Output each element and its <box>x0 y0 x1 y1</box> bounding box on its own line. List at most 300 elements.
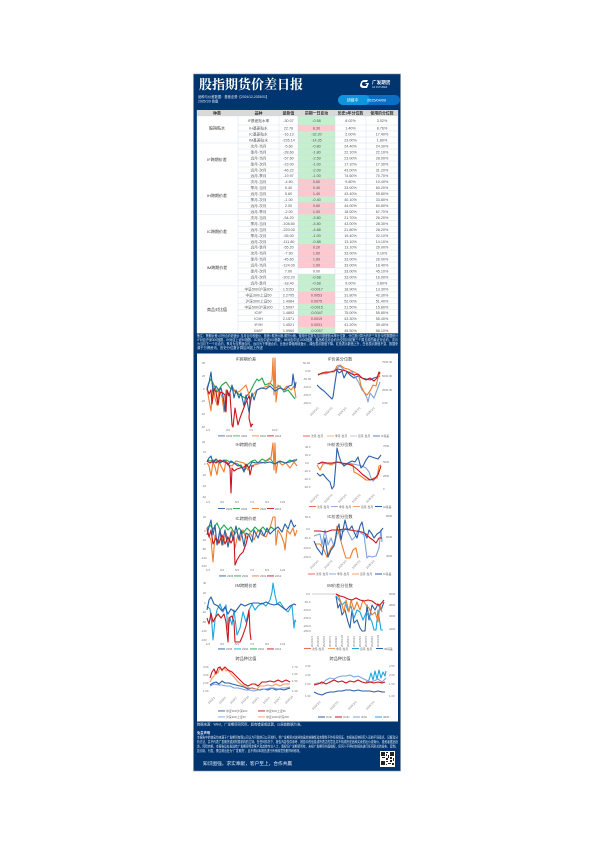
rows: IH spreads: 次月-当月 <box>251 179 267 184</box>
chart: index basis ratios: 2.50 <box>305 664 311 668</box>
rows: IF spreads: -46.22 <box>283 168 294 172</box>
chart: IM spread line: 1/3 <box>206 642 210 646</box>
rows: ratios: 55.80% <box>376 311 389 315</box>
chart: IM spread line: -80 <box>202 620 206 624</box>
rows: IC spreads: 43.00% <box>344 222 357 226</box>
legend: IF spread line: 2303 <box>226 434 233 438</box>
rows: index basis: -30.07 <box>283 119 294 123</box>
chart: IM percentile: 2023/1/3 <box>310 636 314 647</box>
chart: IC spread line: 3/3 <box>220 568 224 572</box>
risk disclaimer: 如引用、刊发，需注明出处为“广发期货”，且不得对本报告进行有悖原意的删节和修改。 <box>197 748 302 753</box>
chart: IC spread line: 5/3 <box>235 568 239 572</box>
chart: IM percentile: 4600 <box>389 614 396 618</box>
category labels: 股指贴水 <box>209 124 225 130</box>
date pill: 研报中 <box>347 97 359 102</box>
rows: IH spreads: 季月-次月 <box>251 197 267 202</box>
rows: IM spreads: 9.10% <box>377 252 388 256</box>
rows: IH spreads: 远月-当月 <box>251 191 267 196</box>
chart: IM percentile: 4800 <box>389 603 396 607</box>
rows: ratios: 43.30% <box>344 317 357 321</box>
chart: index ratios: 1.50 <box>292 679 298 683</box>
chart: IM percentile: IM价差分位数 <box>327 582 354 589</box>
legend: IH spread line: 2301 <box>260 507 267 511</box>
slogan: 知识图强，求实奉献，客户至上，合作共赢 <box>203 760 292 767</box>
rows: IF spreads: -1.00 <box>312 174 321 178</box>
chart: IF spread line: 7/3 <box>249 428 253 432</box>
rows: IH spreads: 0.60 <box>313 180 320 184</box>
rows: IC spreads: -4.68 <box>312 228 321 232</box>
chart: index basis ratios: 1.50 <box>389 682 395 686</box>
chart: IM spread line: 20 <box>203 591 207 595</box>
chart: IM percentile: 4400 <box>389 627 396 631</box>
rows: IC spreads: -55.00 <box>283 234 294 238</box>
chart: index ratios: 2023/10 <box>240 694 250 705</box>
rows: IM spreads: -202.20 <box>282 276 295 280</box>
rows: IC spreads: 13.10% <box>344 240 357 244</box>
rows: IC spreads <box>251 215 389 250</box>
legend: IC spread line <box>219 574 282 578</box>
logo <box>360 79 391 89</box>
rows: IF spreads: 22.10% <box>376 150 389 154</box>
date pill <box>338 95 400 105</box>
chart: IM percentile: 2023/5/3 <box>322 636 326 647</box>
rows: IH spreads: 18.00% <box>344 210 357 214</box>
table header: 前期一日变动 <box>305 110 328 115</box>
chart: index basis ratios: 2023/1/3 <box>311 700 322 711</box>
chart: IF spread percentile: 2023/1/3 <box>309 406 320 417</box>
chart: IM percentile: -50.0 <box>304 600 311 604</box>
rows: IH spreads: 2.00 <box>285 204 292 208</box>
rows: IF spreads: -23.00 <box>283 162 294 166</box>
chart: index ratios: 2023/7 <box>229 696 238 705</box>
legend: index ratios: 中证1000/沪深300 <box>266 715 289 719</box>
rows: ratios: 52.00% <box>344 299 357 303</box>
rows: index basis: 2.00% <box>345 132 356 136</box>
chart: IF spread percentile: -50.00 <box>303 377 311 381</box>
rows: IM spreads: 远月-次月 <box>251 275 267 280</box>
chart: IF spread percentile: 2023/7/3 <box>323 406 334 417</box>
chart: IC percentile: 2024/1/3 <box>337 559 348 570</box>
chart: IM percentile: 2023/11/3 <box>340 634 344 647</box>
chart: IH percentile: 0 <box>383 487 385 491</box>
rows: ratios: 2.2705 <box>283 293 294 297</box>
chart: index ratios: 2.00 <box>203 681 209 685</box>
chart: index ratios: 1.30 <box>292 689 298 693</box>
legend: IM spread line: 2302 <box>242 647 249 651</box>
rows: IC spreads: -108.80 <box>282 222 295 226</box>
rows: IF spreads: 次月-当月 <box>251 143 267 148</box>
legend: IF spread line: 2302 <box>241 434 248 438</box>
rows: IF spreads: 季月-当月 <box>251 149 267 154</box>
chart: index ratios: 2024/7 <box>273 696 282 705</box>
legend: IM percentile <box>304 647 393 651</box>
rows: IH spreads: -2.00 <box>284 210 293 214</box>
legend: IF percentile: 远月-当月 <box>358 434 370 438</box>
legend: index ratios: 中证500/上证50 <box>266 709 286 713</box>
rows: IM spreads: 远月-季月 <box>251 280 267 286</box>
chart: index basis ratios: 2023/7/3 <box>329 700 340 711</box>
rows: index basis: 8.02% <box>345 119 356 123</box>
legend: IM spread line <box>218 647 282 651</box>
chart: IH spread line: 0 <box>204 462 206 466</box>
rows: IM spreads: 26.00% <box>376 258 389 262</box>
rows: IH spreads: 9.80% <box>345 180 356 184</box>
legend: IH percentile: 次月-当月 <box>317 505 329 509</box>
rows: IF spreads: 远月-次月 <box>251 167 267 172</box>
chart: IM percentile: -150.0 <box>303 616 311 620</box>
chart: IF spread line: 0 <box>203 387 205 391</box>
rows: ratios: IM/IF <box>254 329 263 333</box>
chart: IC percentile: 6000 <box>386 535 393 539</box>
legend: IF spread line <box>218 434 282 438</box>
chart: index ratios: 3.00 <box>203 673 209 677</box>
legend: IH spread line: 2303 <box>226 507 233 511</box>
category labels: 商品对比值 <box>207 306 227 312</box>
rows: IM spreads: 33.00% <box>344 276 357 280</box>
rows: IM spreads: -124.00 <box>282 264 295 268</box>
table note: 备注：跨期价差=月份合约收盘价-当月合约收盘价，基差=现货价格-期货价格，使用分位数为当月基差贴水率分位数，分位数计算为历史三年至今的数据统计 <box>197 333 399 338</box>
rows: ratios: 1.4892 <box>283 311 294 315</box>
logo: GF FUTURES <box>372 86 388 89</box>
rows: IC spreads: 19.40% <box>344 234 357 238</box>
chart: index ratios: 2024/1 <box>251 696 260 705</box>
rows: IM spreads: 3.80% <box>377 282 388 286</box>
chart: IH percentile: 7500 <box>383 444 390 448</box>
table header: 历史3年分位数 <box>338 110 363 115</box>
chart: IF spread percentile: -200.0 <box>303 401 311 405</box>
chart: IH spread line: -40 <box>202 484 206 488</box>
legend: IH spread line <box>218 507 282 511</box>
chart: IH spread line: IH跨期价差 <box>236 441 256 448</box>
table <box>197 110 398 334</box>
rows: IH spreads: -1.00 <box>284 198 293 202</box>
category labels: IC跨期价差 <box>207 228 227 234</box>
category labels <box>207 124 227 312</box>
chart: IC percentile <box>303 513 393 570</box>
table header <box>197 110 398 116</box>
chart: IH spread line <box>202 440 297 504</box>
table grid <box>197 110 398 334</box>
legend: index basis ratios: IF/IH <box>361 715 367 719</box>
legend: IC spread line: 2303 <box>227 574 234 578</box>
rows: IC spreads: 次月-当月 <box>251 215 267 220</box>
rows: IF spreads: -0.80 <box>312 144 321 148</box>
rows: IF spreads: 43.00% <box>344 168 357 172</box>
legend: IH percentile: 季月-当月 <box>339 505 351 509</box>
rows: index basis: -235.14 <box>282 138 295 142</box>
chart: IF spread percentile: 50.00 <box>303 361 310 365</box>
rows: IC spreads: 14.10% <box>376 240 389 244</box>
table note: 源于万得资讯，历史分位数计算区间如上所述 <box>197 345 264 350</box>
chart: IH spread line: 5/3 <box>235 500 239 504</box>
rows: IM spreads <box>251 251 389 286</box>
rows: ratios: 31.80% <box>344 293 357 297</box>
icon: QR code <box>380 751 395 767</box>
rows: IF spreads: 季月-次月 <box>251 161 267 166</box>
rows: IH spreads: 67.70% <box>376 210 389 214</box>
rows: IM spreads: 1.60 <box>313 252 320 256</box>
legend: index ratios: 中证500/沪深300 <box>226 709 248 713</box>
table note <box>197 333 399 350</box>
legend: IF percentile: IF基差 <box>381 434 389 438</box>
chart: IC percentile: -50.0 <box>304 536 311 540</box>
risk disclaimer <box>197 730 399 753</box>
chart: IH spread line: 7/3 <box>250 500 254 504</box>
rows: IC spreads: 远月-次月 <box>251 239 267 244</box>
rows: ratios: 1.5097 <box>283 305 294 309</box>
chart: IM spread line: 0 <box>204 601 206 605</box>
chart: IH spread line: 1/3 <box>206 500 210 504</box>
rows: ratios: 41.20% <box>344 323 357 327</box>
chart: IF spread percentile: 0.00 <box>305 369 311 373</box>
rows: ratios: 0.0031 <box>311 323 322 327</box>
chart: IM spread line: 3/3 <box>220 642 224 646</box>
chart: IH percentile: 2025/1/3 <box>365 493 376 504</box>
category labels: IM跨期价差 <box>207 264 227 270</box>
chart: IC spread line: -160 <box>201 564 207 568</box>
chart: IM percentile: 2024/5/3 <box>358 636 362 647</box>
chart: IH percentile: 2500 <box>383 474 390 478</box>
rows: index basis: 1.80% <box>377 138 388 142</box>
chart: IC percentile: 50.0 <box>305 515 311 519</box>
rows: ratios: -0.0015 <box>310 305 323 309</box>
rows: IH spreads: 43.40% <box>344 192 357 196</box>
chart: IH percentile: 20.0 <box>305 453 311 457</box>
date pill: 2025/04/09 <box>367 98 386 102</box>
rows: IM spreads: -7.90 <box>284 252 293 256</box>
rows: IC spreads: 21.70% <box>344 216 357 220</box>
risk disclaimer: 资，风险自担。本报告旨在发送给广发期货特定客户及其他专业人士，版权归广发期货所有，未经广发期货书面授权，任何人不得对本报告进行任何形式的发布、复制。 <box>197 744 398 748</box>
rows: IH spreads: 季月-当月 <box>251 185 267 190</box>
panel: charts background <box>197 354 398 722</box>
rows: index basis: -0.58 <box>312 119 321 123</box>
rows: IH spreads: 33.80% <box>376 198 389 202</box>
chart: index basis ratios: 2024/1/3 <box>347 700 358 711</box>
chart: IF spread percentile <box>303 356 393 417</box>
rows: IH spreads: 59.80% <box>376 192 389 196</box>
rows: IC spreads: -4.80 <box>312 222 321 226</box>
chart: IM percentile: -100.0 <box>303 608 311 612</box>
chart: IC percentile: 0.0 <box>306 527 310 531</box>
rows: IM spreads: -18.40 <box>283 282 294 286</box>
chart: IC percentile: -150.0 <box>303 555 311 559</box>
rows: IF spreads: -57.60 <box>283 156 294 160</box>
rows: ratios: IF/IH <box>254 323 263 327</box>
rows: IH spreads: 0.60 <box>313 204 320 208</box>
rows: ratios: -0.0047 <box>310 311 323 315</box>
rows: index basis: 1.40% <box>345 126 356 130</box>
rows: ratios: -0.0017 <box>310 287 323 291</box>
legend: IC percentile <box>308 572 392 576</box>
rows: IH spreads: 1.00 <box>313 210 320 214</box>
legend: IM spread line: 2301 <box>258 647 265 651</box>
chart: IC spread line: 20 <box>203 515 207 519</box>
chart: IM spread line <box>201 581 296 646</box>
rows: IH spreads: 5.60 <box>285 192 292 196</box>
rows: IH spreads: 远月-次月 <box>251 203 267 208</box>
chart: IF spread percentile: -100.0 <box>303 385 311 389</box>
chart: IF spread percentile: 2024/1/3 <box>337 406 348 417</box>
rows: ratios: -0.0057 <box>310 329 323 333</box>
rows: IC spreads: 26.20% <box>376 216 389 220</box>
rows: index basis: -14.35 <box>311 138 322 142</box>
rows: IF spreads: 70.70% <box>376 174 389 178</box>
chart: IH percentile: IH价差分位数 <box>327 441 353 448</box>
rows: IC spreads: 13.10% <box>344 246 357 250</box>
rows: IH spreads: 40.10% <box>344 198 357 202</box>
rows: IF spreads: 74.60% <box>344 174 357 178</box>
chart: IM percentile: 2023/9/3 <box>334 636 338 647</box>
chart: IC percentile: -100.0 <box>303 546 311 550</box>
rows: IM spreads: 次月-当月 <box>251 251 267 256</box>
risk disclaimer: 免责声明 <box>197 730 211 735</box>
rows: ratios: 42.30% <box>376 293 389 297</box>
rows: ratios: IC/IF <box>254 311 263 315</box>
rows: ratios: 中证300/上证50 <box>245 292 272 297</box>
rows: IF spreads: 远月-当月 <box>251 155 267 160</box>
chart: index ratios <box>203 655 298 705</box>
rows: IH spreads: 60.20% <box>376 186 389 190</box>
legend: IM spread line: 2212 <box>275 647 282 651</box>
rows: IH spreads: 远月-季月 <box>251 209 267 214</box>
chart: IC spread line: IC跨期价差 <box>236 515 256 522</box>
chart: IF spread line: IF跨期价差 <box>236 356 256 362</box>
rows: IH spreads: -0.40 <box>312 198 321 202</box>
chart: IC percentile: 2025/1/3 <box>365 559 376 570</box>
legend: IF percentile: 次月-当月 <box>311 434 323 438</box>
rows: IC spreads: 28.30% <box>376 222 389 226</box>
chart: IH percentile: 2024/1/3 <box>337 493 348 504</box>
chart: IC spread line: -40 <box>202 538 206 542</box>
rows: IH spreads: 33.00% <box>344 186 357 190</box>
rows: ratios: 21.50% <box>344 305 357 309</box>
rows: IH spreads: 60.80% <box>376 204 389 208</box>
rows: ratios: 15.80% <box>376 305 389 309</box>
rows: ratios <box>244 286 389 333</box>
report subtitle: 2025/1/9 收盘 <box>198 98 219 104</box>
rows: ratios: 58.10% <box>376 329 389 333</box>
chart: IF spread percentile: 2025/1/3 <box>365 406 376 417</box>
rows: IM spreads: 33.00% <box>344 270 357 274</box>
chart: index ratios: 2024/10 <box>284 694 294 705</box>
legend: index ratios <box>218 709 289 719</box>
chart: IF spread line: -40 <box>201 412 205 416</box>
legend: IF percentile: 季月-当月 <box>335 434 347 438</box>
rows: IM spreads: 45.10% <box>376 270 389 274</box>
rows: IC spreads: 季月-次月 <box>251 233 267 238</box>
chart: index ratios: 2023/1 <box>207 696 216 705</box>
chart: index ratios: 1.00 <box>203 689 209 693</box>
table note: IF对应沪深300指数，IH对应上证50指数，IC对应中证500指数，IM对应中证1000指数，各品种当月合约为交割月前第三个周五前的最近月合约，次月 <box>197 337 398 342</box>
rows: IF spreads: -2.09 <box>312 168 321 172</box>
rows: IC spreads: -1.00 <box>312 234 321 238</box>
rows: IM spreads: 7.00 <box>285 270 292 274</box>
legend: IH percentile <box>309 505 392 509</box>
rows: ratios: 75.00% <box>344 311 357 315</box>
chart: index ratios: 跨品种比值 <box>236 655 256 662</box>
chart: index basis ratios: 2024/7/3 <box>365 700 376 711</box>
legend: IH percentile: 远月-当月 <box>361 505 373 509</box>
chart: IM spread line: 9/3 <box>265 642 269 646</box>
chart: index ratios: 2023/4 <box>218 696 227 705</box>
chart: IH percentile: 5000 <box>383 460 390 464</box>
chart: IM percentile: 2023/7/3 <box>328 636 332 647</box>
rows: IH spreads <box>251 179 389 214</box>
chart: index basis ratios: 2.00 <box>389 673 395 677</box>
rows: IM spreads: 18.40% <box>376 264 389 268</box>
rows: IC spreads: -0.88 <box>312 240 321 244</box>
chart: IF spread percentile: 7500.00 <box>382 360 393 364</box>
legend: IM spread line: 2303 <box>226 647 233 651</box>
rows: IM spreads: -0.68 <box>312 282 321 286</box>
rows: IM spreads: -0.68 <box>312 276 321 280</box>
rows: IH spreads: 0.40 <box>313 186 320 190</box>
chart: IC percentile: 2023/7/3 <box>323 559 334 570</box>
rows: IH spreads: 5.40 <box>285 186 292 190</box>
chart: IC spread line: -120 <box>201 556 207 560</box>
rows: ratios: 0.0053 <box>311 293 322 297</box>
chart: IH spread line: -20 <box>202 473 206 477</box>
table header: 最新值 <box>283 110 294 115</box>
rows: IC spreads: -220.00 <box>282 228 295 232</box>
rows: IC spreads: 32.10% <box>376 234 389 238</box>
chart: index ratios: 2024/4 <box>262 696 271 705</box>
rows: ratios: 沪深300/上证50 <box>245 298 272 303</box>
chart: IH percentile: -20.0 <box>304 469 311 473</box>
chart: IM percentile <box>303 582 396 647</box>
legend: IF spread line: 2212 <box>275 434 282 438</box>
rows: IH spreads: -4.60 <box>284 180 293 184</box>
chart: IF spread percentile: IF价差分位数 <box>328 356 353 362</box>
chart: IF spread percentile: 2500.00 <box>382 388 393 392</box>
chart: IC percentile: 2024/7/3 <box>351 559 362 570</box>
delta cell colours <box>298 116 335 334</box>
legend: IM percentile: 季月-当月 <box>336 647 348 651</box>
legend: IC percentile: IC基差 <box>383 572 392 576</box>
chart: IM percentile: 2024/7/3 <box>364 636 368 647</box>
rows: index basis: 17.40% <box>376 132 389 136</box>
chart: IF spread line: 10/3 <box>272 428 278 432</box>
chart: IM percentile: 5000 <box>389 592 396 596</box>
legend: IH spread line: 2212 <box>275 507 282 511</box>
rows: IF spreads: 17.10% <box>344 162 357 166</box>
chart: IC percentile: 8000 <box>386 514 393 518</box>
rows: index basis: IC基差贴水 <box>249 131 268 136</box>
rows: index basis <box>248 118 389 142</box>
chart: IC spread line: 7/3 <box>250 568 254 572</box>
chart: IM percentile: 2024/1/3 <box>346 636 350 647</box>
legend: index basis ratios: IC/IF <box>326 715 332 719</box>
table header: 品种 <box>255 110 262 115</box>
chart: index basis ratios: 1.50 <box>305 682 311 686</box>
chart: index basis ratios: 1.00 <box>389 694 395 698</box>
rows: IF spreads: -1.00 <box>312 162 321 166</box>
chart: IC percentile: 2023/1/3 <box>309 559 320 570</box>
risk disclaimer: 析方法，并不代表广发期货或其附属机构的立场。在任何情况下，报告内容仅供参考，报告中的信息或所表达的意见并不构成所述品种买卖的出价或询价，投资者据此投 <box>197 739 399 744</box>
chart: index ratios: 1.60 <box>292 672 298 676</box>
category labels: IH跨期价差 <box>207 192 227 198</box>
chart: IC percentile: IC价差分位数 <box>327 513 353 520</box>
legend: IH percentile: IH基差 <box>383 505 392 509</box>
legend: IM percentile: 远月-当月 <box>360 647 372 651</box>
chart: IC spread line: 1/3 <box>206 568 210 572</box>
rows: IC spreads: 26.00% <box>376 246 389 250</box>
rows: index basis: IM基差贴水 <box>249 137 268 142</box>
rows: ratios: 中证500/沪深300 <box>244 286 273 291</box>
legend: IH spread line: 2302 <box>241 507 248 511</box>
rows: IF spreads: -2.59 <box>312 156 321 160</box>
rows: ratios: 39.40% <box>376 323 389 327</box>
